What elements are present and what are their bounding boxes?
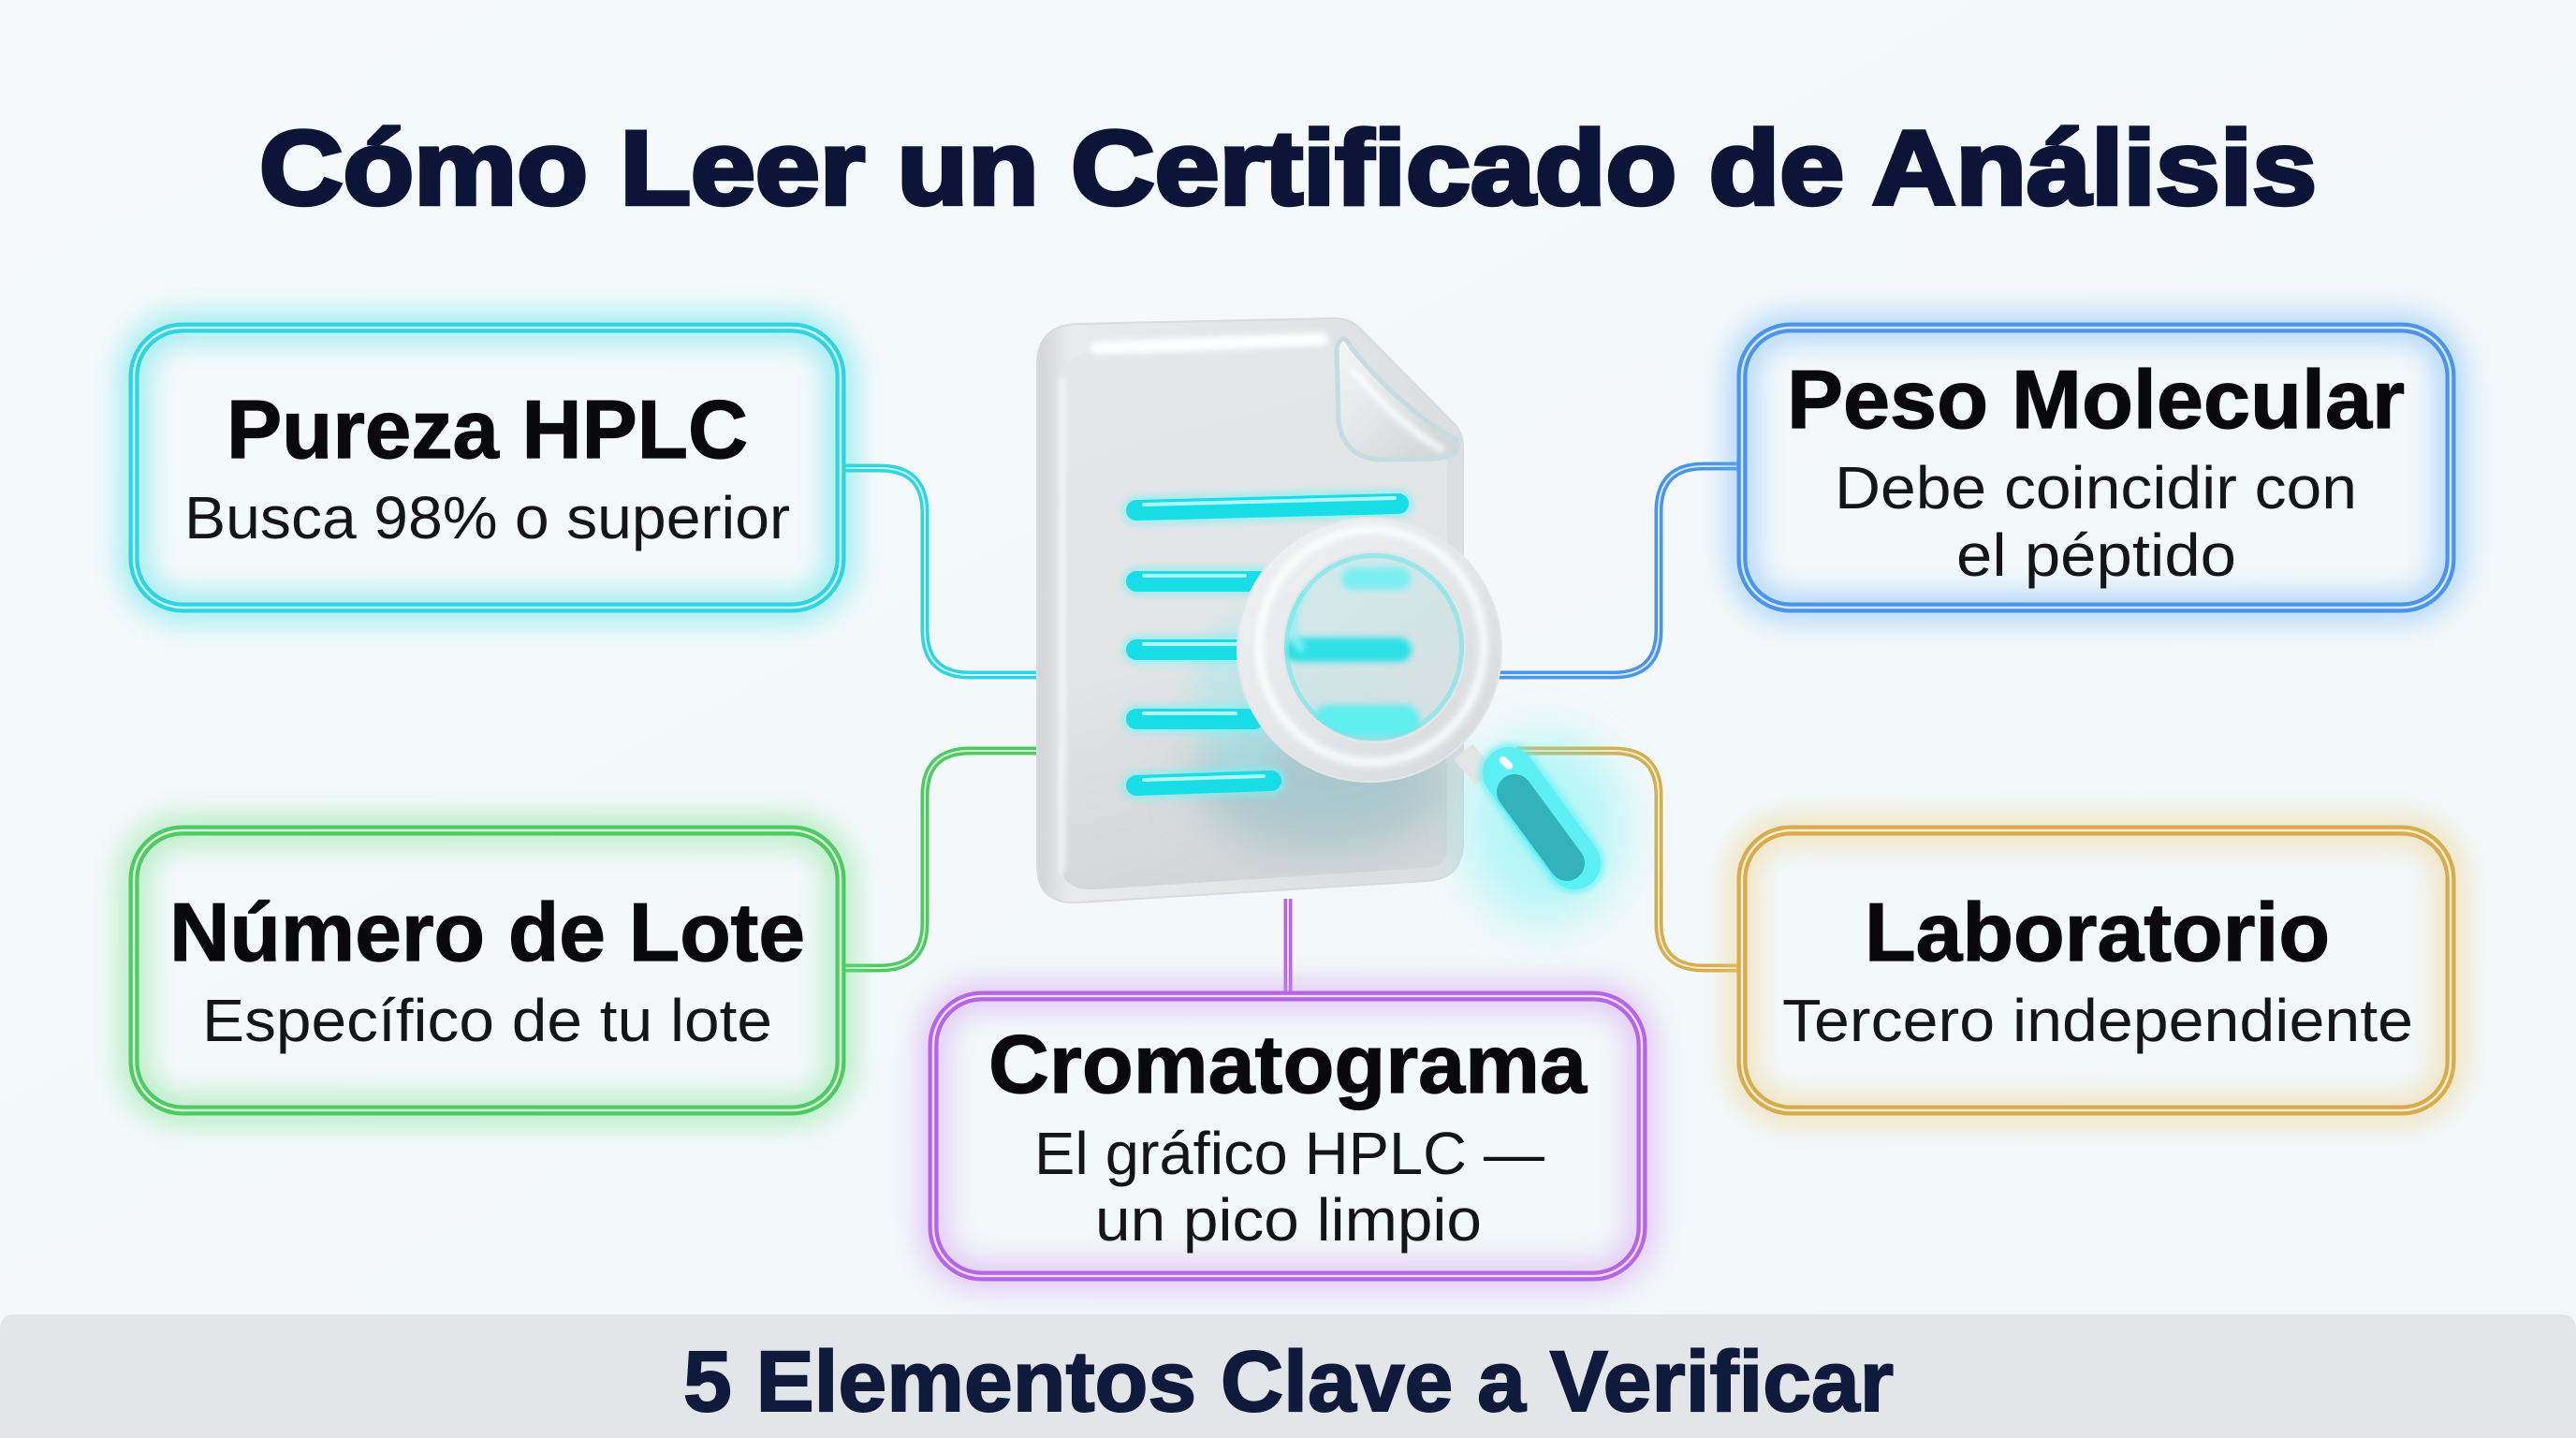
description: Debe coincidir con: [1835, 454, 2357, 521]
shadow under magnifier: [1193, 707, 1446, 847]
glow near handle: [1465, 735, 1624, 922]
description: el péptido: [1956, 521, 2236, 589]
icon: document body: [1037, 318, 1463, 902]
glow under magnifier: [1193, 618, 1296, 777]
connector: cromatograma to document: [1284, 899, 1292, 994]
description: El gráfico HPLC —: [1034, 1120, 1544, 1187]
description: Específico de tu lote: [202, 987, 772, 1054]
document text lines: [1136, 498, 1398, 785]
panel: numero de lote: [134, 830, 841, 1110]
description: [1835, 454, 2357, 589]
panel: peso molecular: [1742, 328, 2451, 608]
footer band: [0, 1314, 2576, 1438]
connector: laboratorio to document: [1516, 751, 1738, 968]
icon: folded corner: [1337, 339, 1458, 460]
connector: pureza to document: [844, 468, 1041, 675]
description: Busca 98% o superior: [184, 484, 790, 551]
description: Tercero independiente: [1782, 987, 2413, 1054]
description: [1034, 1120, 1544, 1254]
icon: document with magnifier: [1037, 318, 1624, 922]
connector: peso molecular to document: [1494, 466, 1738, 675]
title: Cómo Leer un Certificado de Análisis: [259, 110, 2317, 227]
footer text: 5 Elementos Clave a Verificar: [683, 1334, 1894, 1430]
panel: cromatograma: [933, 996, 1642, 1276]
icon: magnifier ring: [1237, 518, 1501, 782]
heading: Cromatograma: [988, 1018, 1588, 1110]
icon: magnifier handle: [1463, 752, 1574, 863]
icon: magnifier lens: [1281, 550, 1468, 744]
heading: Número de Lote: [169, 886, 805, 978]
description: un pico limpio: [1095, 1186, 1482, 1254]
heading: Laboratorio: [1865, 886, 2330, 978]
panel: pureza HPLC: [134, 328, 841, 608]
heading: Pureza HPLC: [227, 383, 748, 476]
panel: laboratorio: [1742, 830, 2451, 1110]
connector: numero de lote to document: [844, 751, 1041, 968]
heading: Peso Molecular: [1787, 353, 2405, 446]
